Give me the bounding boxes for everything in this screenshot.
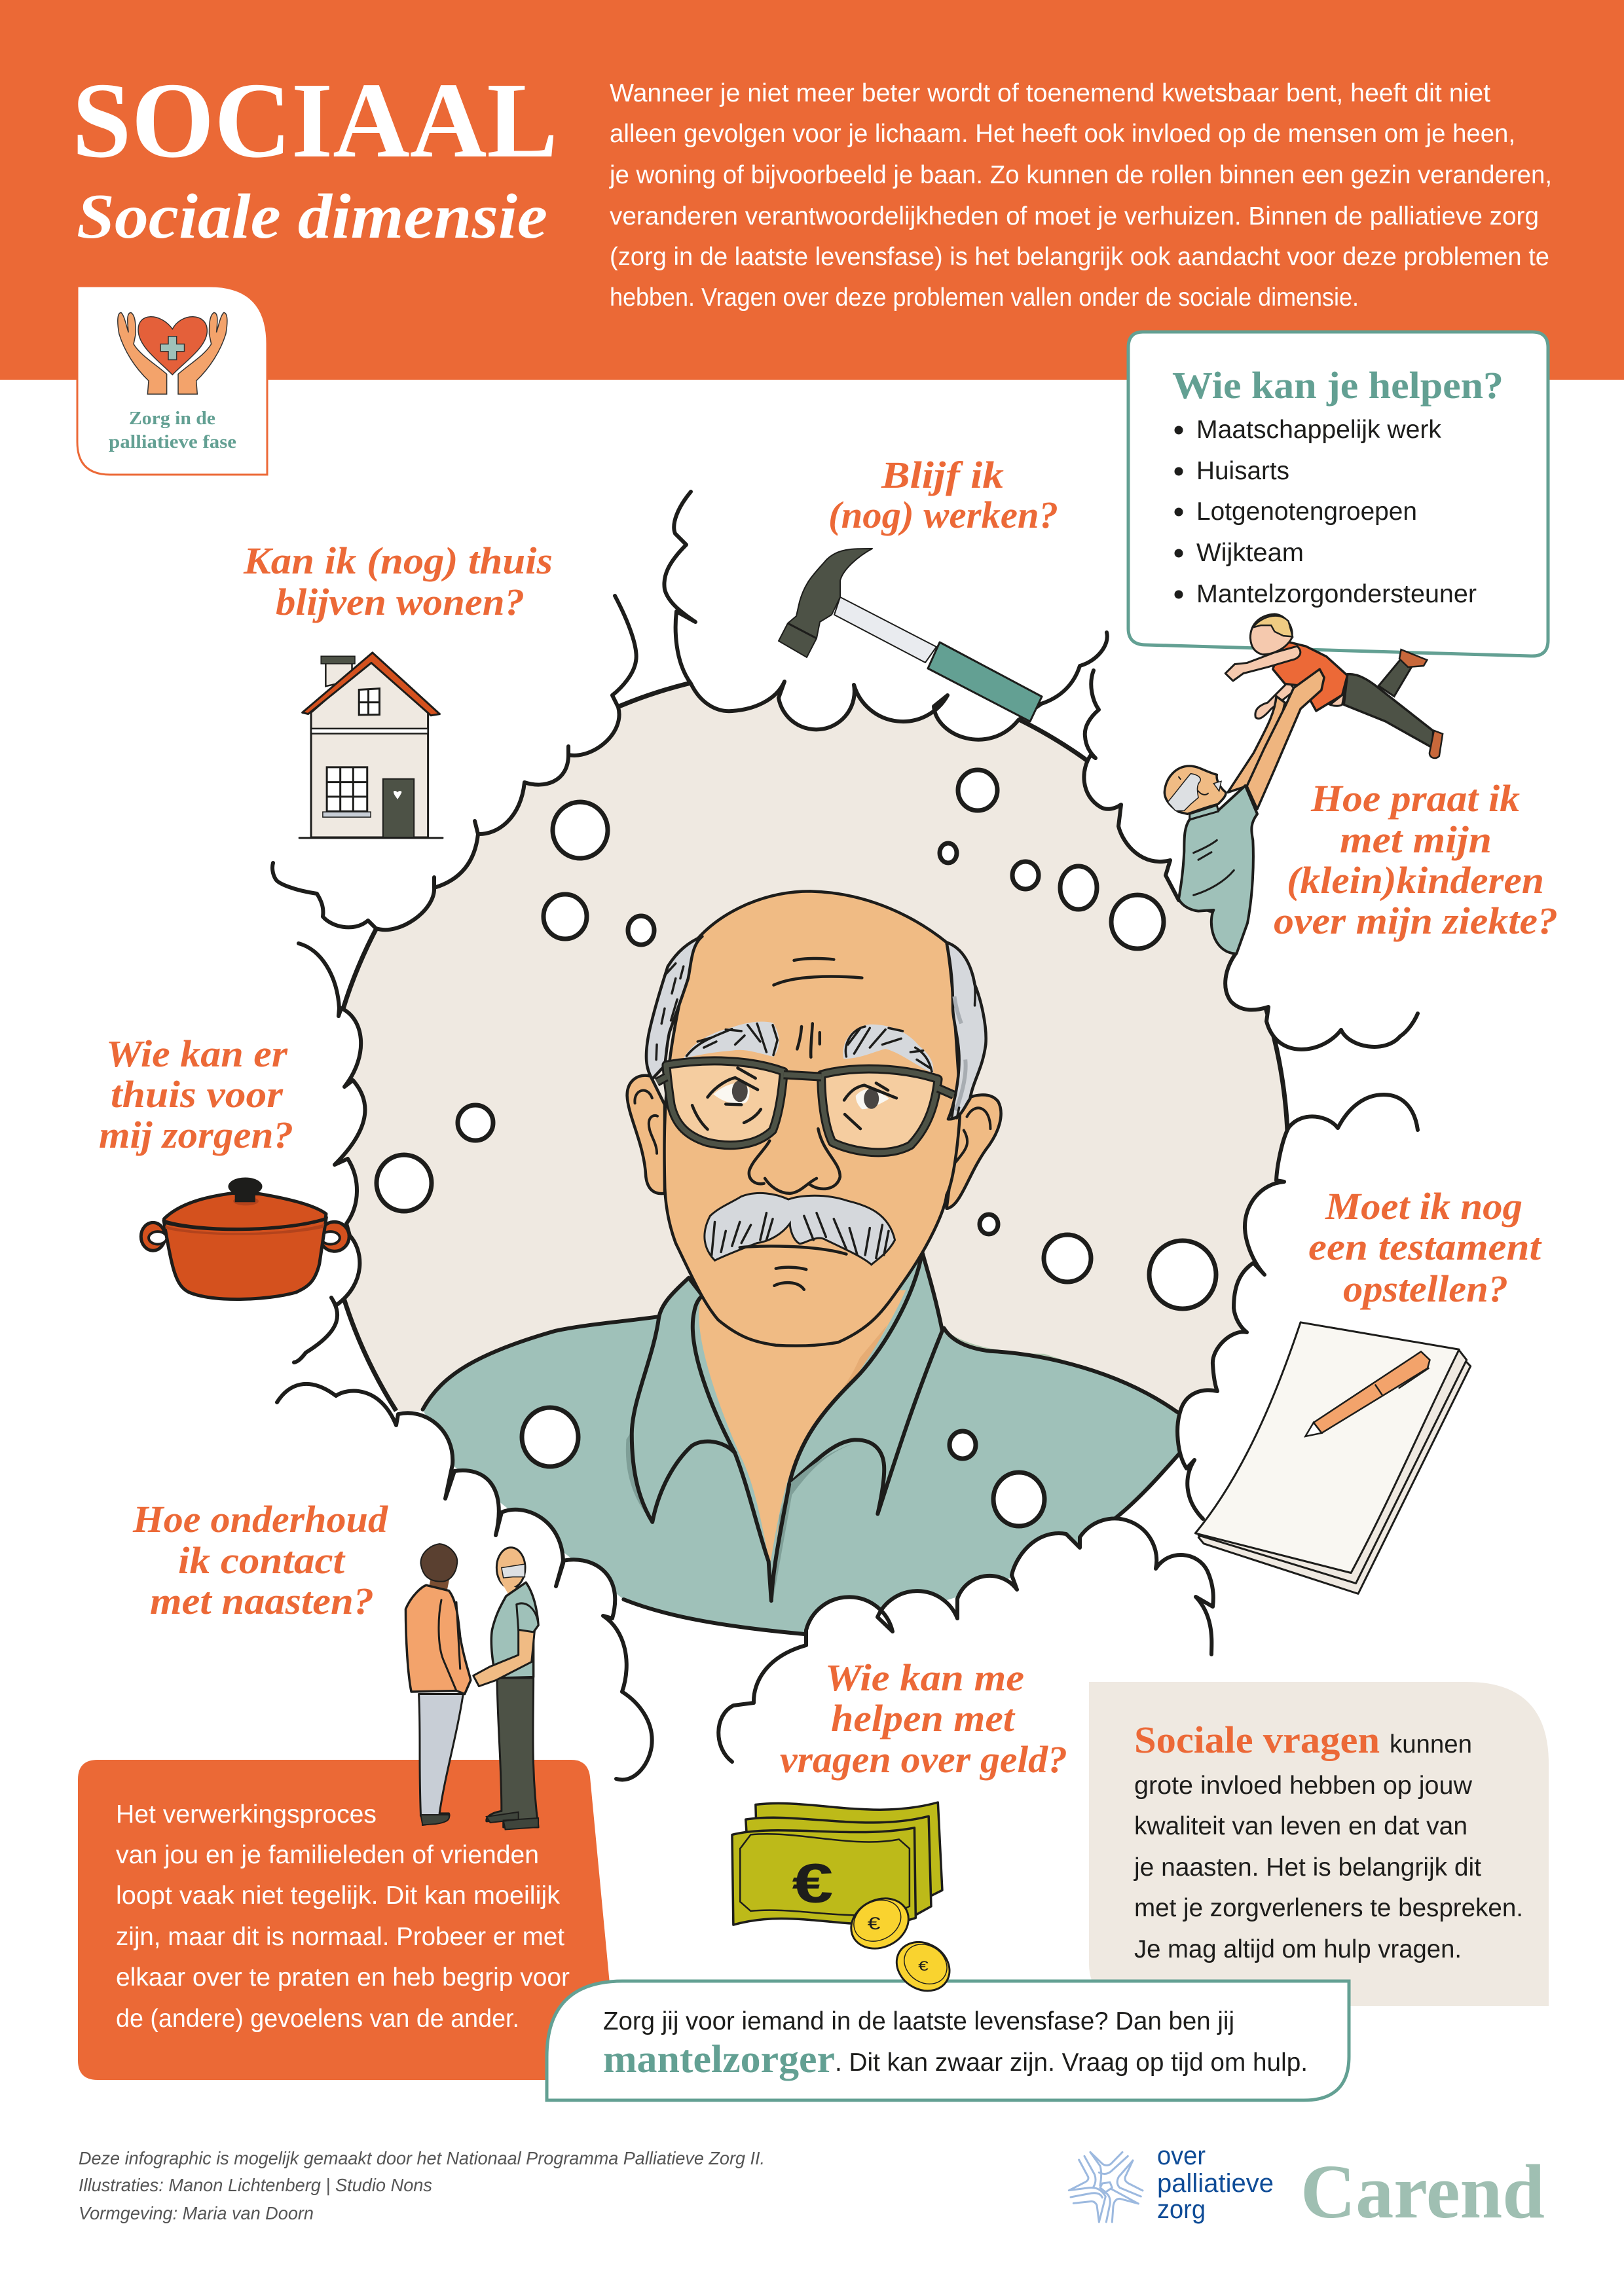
intro text: hebben. Vragen over deze problemen vallen onder de sociale dimensie. (610, 283, 1359, 312)
person with shirt (487, 1678, 538, 1827)
question: geld: vragen over geld? (780, 1738, 1067, 1781)
badge: zorg in de palliatieve fase (77, 286, 267, 475)
cloud: grandchild (1084, 670, 1418, 1049)
grandfather front arm (1247, 669, 1324, 809)
intro text: alleen gevolgen voor je lichaam. Het heeft ook invloed op de mensen om je heen, (610, 120, 1515, 148)
nose (749, 1129, 840, 1194)
list (1175, 416, 1477, 608)
icon: grandfather lifting child (1164, 614, 1443, 954)
intro text: Wanneer je niet meer beter wordt of toenemend kwetsbaar bent, heeft dit niet (610, 79, 1490, 107)
intro text: (zorg in de laatste levensfase) is het belangrijk ook aandacht voor deze problemen te (610, 243, 1549, 271)
icon: banknotes and coins (732, 1802, 958, 1996)
question: testament: een testament (1308, 1226, 1542, 1268)
icon: hammer (779, 549, 1042, 721)
sociale vragen text: met je zorgverleners te bespreken. (1134, 1894, 1523, 1922)
cloud: contact (277, 1384, 652, 1780)
question: zorgen (99, 1032, 293, 1156)
grandfather head and shirt (1164, 766, 1257, 954)
eyebrows (685, 1023, 779, 1057)
badge caption: Zorg in de (129, 409, 215, 429)
icon: house (299, 653, 443, 838)
ear details (635, 1091, 990, 1162)
pen (1314, 1351, 1430, 1433)
logo wordmark: palliatieve (1157, 2169, 1274, 2198)
moustache (705, 1193, 895, 1265)
ears (627, 1076, 665, 1194)
cloud: left (294, 943, 365, 1362)
eyes (713, 1084, 750, 1104)
verwerkingsproces text: de (andere) gevoelens van de ander. (116, 2005, 519, 2033)
panel: sociale vragen (1089, 1682, 1549, 2006)
head (665, 891, 961, 1346)
verwerkingsproces text: elkaar over te praten en heb begrip voor (116, 1963, 570, 1992)
mantelzorger text: Zorg jij voor iemand in de laatste levensfase? Dan ben jij (603, 2007, 1234, 2035)
verwerkingsproces text: loopt vaak niet tegelijk. Dit kan moeilijk (116, 1882, 560, 1910)
question: contact (132, 1498, 388, 1622)
shirt (423, 1252, 1180, 1635)
badge caption: palliatieve fase (109, 432, 236, 452)
credits: Deze infographic is mogelijk gemaakt door het Nationaal Programma Palliatieve Zorg II. (79, 2148, 765, 2168)
panel: mantelzorger (547, 1981, 1349, 2100)
verwerkingsproces text: van jou en je familieleden of vrienden (116, 1841, 539, 1869)
icon: banknotes and coins: € (918, 1958, 929, 1974)
question: kinderen: over mijn ziekte? (1274, 900, 1558, 942)
sociale vragen text: Sociale vragen (1134, 1719, 1380, 1761)
question: kinderen (1274, 777, 1558, 942)
question: geld: Wie kan me (825, 1656, 1024, 1699)
icon: pot (141, 1177, 349, 1300)
child and arms (1225, 614, 1443, 809)
credits: Illustraties: Manon Lichtenberg | Studio Nons (79, 2175, 432, 2195)
logo wordmark: zorg (1157, 2195, 1206, 2224)
cloud: money (718, 1519, 1213, 1762)
mantelzorger text (603, 2007, 1308, 2081)
sociale vragen text: grote invloed hebben op jouw (1134, 1772, 1473, 1800)
icon: star (1069, 2152, 1143, 2222)
collar right (789, 1252, 942, 1514)
list: Huisarts (1196, 457, 1289, 485)
verwerkingsproces text: zijn, maar dit is normaal. Probeer er met (116, 1923, 564, 1951)
cloud: hammer (664, 492, 1107, 740)
list: Wijkteam (1196, 539, 1304, 567)
question: geld (780, 1656, 1067, 1781)
credits: Vormgeving: Maria van Doorn (79, 2203, 314, 2223)
mantelzorger text: mantelzorger (603, 2037, 835, 2081)
hair right (946, 942, 986, 1119)
question: contact: met naasten? (150, 1580, 374, 1622)
intro text: veranderen verantwoordelijkheden of moet je verhuizen. Binnen de palliatieve zorg (610, 202, 1539, 230)
grandfather rear arm (1228, 697, 1285, 792)
mantelzorger text: . Dit kan zwaar zijn. Vraag op tijd om hulp. (835, 2049, 1308, 2077)
hair left (646, 936, 702, 1079)
sociale vragen text (1134, 1719, 1523, 1963)
child head (1250, 614, 1292, 655)
badge caption (109, 409, 236, 452)
thought bubbles (377, 770, 1216, 1526)
face (627, 891, 1001, 1346)
question: werken: (nog) werken? (828, 494, 1058, 536)
collar left (626, 1407, 659, 1522)
wrinkles (773, 958, 862, 1057)
child rear arm (1255, 682, 1295, 719)
cloud: testament (1177, 1095, 1418, 1519)
title: SOCIAAL (72, 60, 558, 180)
question: kinderen: Hoe praat ik (1310, 777, 1520, 820)
icon: two people talking (405, 1544, 538, 1829)
icon: banknotes and coins: € (868, 1914, 881, 1933)
panel: verwerkingsproces (78, 1760, 619, 2080)
child legs (1378, 659, 1413, 697)
question: zorgen: thuis voor (111, 1073, 283, 1116)
question: thuis wonen: blijven wonen? (276, 581, 525, 623)
glasses (666, 1061, 938, 1152)
child arm (1225, 646, 1301, 681)
eye lines (692, 1068, 896, 1129)
question: geld: helpen met (831, 1697, 1016, 1740)
intro text: je woning of bijvoorbeeld je baan. Zo kunnen de rollen binnen een gezin veranderen, (609, 161, 1552, 189)
verwerkingsproces text (116, 1800, 570, 2033)
list: Maatschappelijk werk (1196, 416, 1441, 444)
neck (699, 1290, 906, 1564)
icon: notepad and pen (1195, 1322, 1471, 1594)
person with jacket (419, 1694, 463, 1825)
sociale vragen text: Je mag altijd om hulp vragen. (1134, 1935, 1462, 1963)
subtitle: Sociale dimensie (77, 181, 547, 252)
question: werken: Blijf ik (881, 454, 1004, 496)
question: thuis wonen: Kan ik (nog) thuis (243, 539, 553, 582)
question: testament: opstellen? (1343, 1267, 1508, 1310)
central man illustration (423, 891, 1180, 1635)
euro symbol: € (792, 1852, 834, 1914)
logo wordmark (1157, 2141, 1274, 2224)
question: zorgen: Wie kan er (106, 1032, 287, 1075)
logo: over palliatieve zorg (1069, 2141, 1274, 2224)
header band (0, 0, 1624, 380)
sociale vragen text: je naasten. Het is belangrijk dit (1134, 1853, 1481, 1882)
question: kinderen: (klein)kinderen (1287, 859, 1544, 902)
cloud: house (272, 596, 637, 930)
list: Mantelzorgondersteuner (1196, 580, 1477, 608)
question: kinderen: met mijn (1340, 818, 1492, 861)
credits (79, 2148, 765, 2223)
intro text (609, 79, 1552, 312)
question: werken (828, 454, 1058, 536)
panel: wie kan je helpen (1128, 332, 1548, 656)
sociale vragen text: kunnen (1390, 1730, 1472, 1758)
logo: carend: Carend (1301, 2149, 1545, 2234)
logo wordmark: over (1157, 2141, 1206, 2170)
question: zorgen: mij zorgen? (99, 1114, 293, 1156)
list: Lotgenotengroepen (1196, 498, 1417, 526)
child shirt (1273, 642, 1348, 711)
sociale vragen text: kwaliteit van leven en dat van (1134, 1812, 1467, 1840)
question: testament (1308, 1185, 1542, 1310)
icon: hands holding heart (118, 313, 227, 394)
verwerkingsproces text: Het verwerkingsproces (116, 1800, 377, 1829)
heading: wie kan je helpen: Wie kan je helpen? (1172, 364, 1504, 407)
question: contact: ik contact (178, 1539, 346, 1582)
question: testament: Moet ik nog (1325, 1185, 1522, 1228)
question: contact: Hoe onderhoud (132, 1498, 388, 1540)
question: thuis wonen (243, 539, 553, 623)
beige thought circle (322, 669, 1288, 1412)
